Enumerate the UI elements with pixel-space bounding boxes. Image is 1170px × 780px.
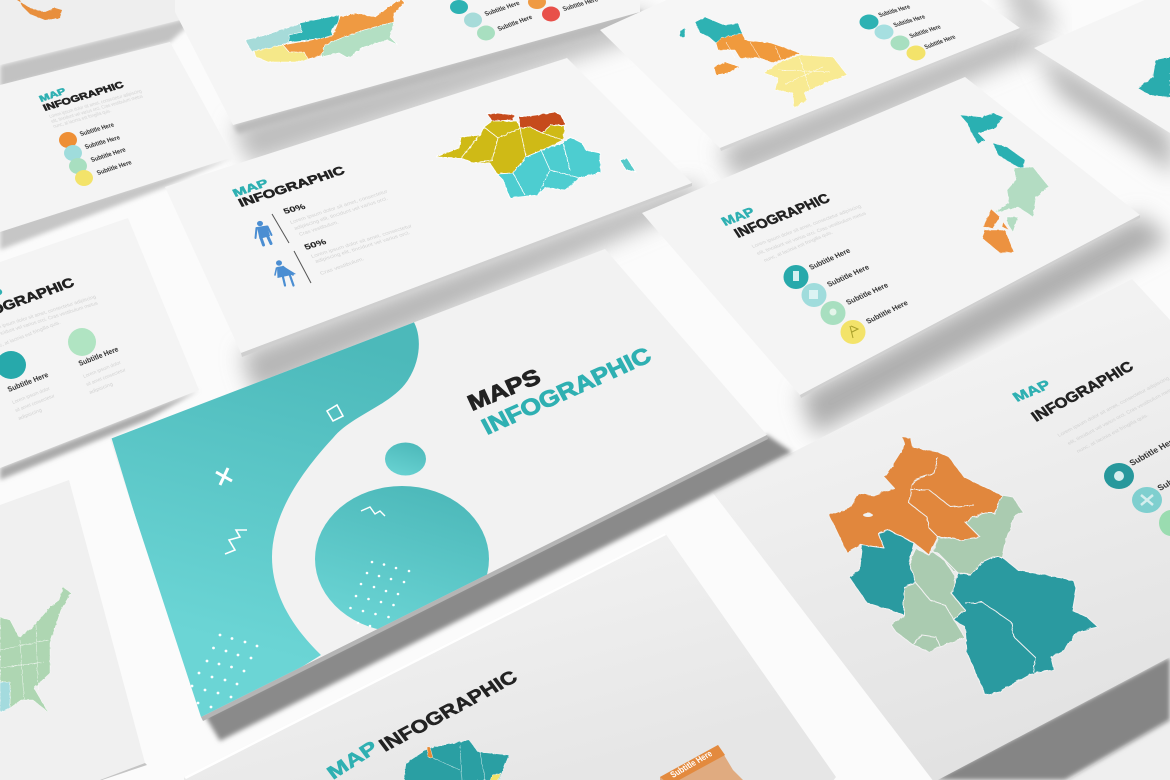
heading: map infographic [37,80,126,114]
icons and labels: UK slide [860,4,957,60]
icon: zigzag left [225,530,247,554]
stat: 50% female: Cras vestibulum. [319,256,365,277]
heading: map infographic: MAP [1009,377,1054,404]
text block: lorem: elit, tincidunt vel varius orci. Cras vestibulum metus [756,211,868,257]
text block: lorem: elit, tincidunt vel varius orci. Cras vestibulum metus [50,94,145,125]
text block: lorem [0,294,100,352]
labels: subtitles: sit amet consectetur [14,393,56,414]
labels: subtitles: adipiscing [88,381,114,396]
stat: 50% female: 50% [303,237,328,252]
panel: top-left slide with orange map [0,0,225,88]
stat: 50% female [294,223,414,283]
map: USA [245,0,405,62]
map: teal corner [1138,57,1170,97]
icons and labels: UK slide: Subtitle Here [877,4,912,19]
heading: map infographic: INFOGRAPHIC [236,163,347,210]
map: Japan [960,113,1049,253]
icon: green circle [68,328,96,356]
labels: subtitles [6,345,127,422]
icons and labels: four subtitles: Subtitle Here [825,263,871,289]
heading: map infographic [0,275,77,327]
labels: subtitles: Subtitle Here [6,370,50,394]
icons and labels: USA slide [450,0,600,40]
stat: 50% female: Lorem ipsum dolor sit amet, consectetur [310,223,414,260]
map: regions [829,437,1098,695]
panel: hero slide [100,249,792,741]
labels: subtitles: Lorem ipsum dolor [11,386,51,406]
text block: lorem: Lorem ipsum dolor sit amet, consectetur adipiscing [48,88,143,120]
icons and labels: USA slide: Subtitle Here [496,14,534,33]
panel: regions map slide [713,279,1170,780]
text block: lorem: elit, tincidunt vel varius orci. Cras vestibulum metus [1067,386,1170,447]
panel: bottom-right corner slide [1065,718,1170,780]
text block: lorem: Lorem ipsum dolor sit amet, consectetur adipiscing [751,204,863,250]
icons and labels: four subtitles: Subtitle Here [90,147,127,164]
shape: small circle [385,442,426,476]
icons and labels: four subtitles: Subtitle Here [84,134,122,151]
text block: lorem: nunc, at lacinia est fringilla quis. [1076,413,1150,455]
heading: map infographic: MAP [231,177,270,200]
icons and labels: UK slide: Subtitle Here [892,14,927,29]
map: orange [17,0,62,20]
stat: 50% male: adipiscing elit, tincidunt vel varius orci. [293,196,389,232]
icons and labels: UK slide: Subtitle Here [908,24,943,40]
map: UK [680,17,847,108]
heading: map infographic: INFOGRAPHIC [1028,358,1137,425]
icon: woman [275,260,296,286]
text block: lorem [1057,376,1170,455]
dots: lower left [191,634,258,708]
map: France [436,112,636,198]
title: maps infographic: INFOGRAPHIC [477,342,655,439]
panel: left slide with two icons [0,218,199,480]
icons and labels: UK slide: Subtitle Here [923,34,957,51]
icons and labels: four subtitles: Subtitle Here [79,122,116,138]
icons and labels: four subtitles [59,122,133,186]
icons and labels: four subtitles: Subtitle Here [96,159,133,177]
title: maps infographic: MAPS [464,364,544,416]
callout: subtitle card [660,745,745,780]
icon: diamond outline [327,405,343,421]
panel: top-right corner slide [1034,0,1170,175]
icon: zigzag circle [361,507,385,516]
stat: 50% female: adipiscing elit, tincidunt vel varius orci. [314,230,411,265]
panel: map infographic slide with four subtitles [0,42,233,250]
heading: map infographic: MAP [718,204,758,228]
text block: lorem: nunc, at lacinia est fringilla quis. [52,108,113,130]
labels: subtitles: sit amet consectetur [85,367,127,388]
text block: lorem [751,204,868,264]
heading: map infographic [323,667,522,780]
stat: 50% male: Lorem ipsum dolor sit amet, consectetur [289,189,389,226]
shape: teal wave [100,318,419,730]
heading: map infographic: INFOGRAPHIC [731,190,833,240]
shape: large circle [315,486,489,632]
stat: 50% male: Cras vestibulum. [298,220,340,238]
panel: Japan slide [642,77,1170,435]
dots: circle [349,561,410,627]
icons and labels: four subtitles: Subtitle Here [807,246,852,272]
heading: map infographic: MAP [37,86,67,104]
icon: cross [216,468,232,485]
heading: map infographic [231,163,347,210]
map: eastern USA [0,587,71,712]
labels: subtitles: Subtitle Here [77,345,120,368]
stat: 50% male [272,189,389,243]
panel: Africa slide [184,533,836,780]
heading: map infographic: INFOGRAPHIC [41,80,126,114]
stat: 50% male: 50% [282,202,307,216]
heading: map infographic: INFOGRAPHIC [375,667,522,756]
icons and labels: four subtitles: Subtitle Here [864,298,910,326]
panel: UK regions slide [600,0,1060,180]
text block: lorem: nunc, at lacinia est fringilla quis. [763,230,834,264]
text block: lorem: Lorem ipsum dolor sit amet, consectetur adipiscing [1057,376,1170,439]
panel: USA regions slide [175,0,660,165]
labels: subtitles: Lorem ipsum dolor [82,360,122,380]
icons and labels: four subtitles [784,246,910,344]
panel: bottom-left USA slide [0,480,147,780]
icons and labels: subtitles [1104,435,1170,536]
icons and labels: four subtitles: Subtitle Here [844,281,890,307]
callout: subtitle card: Subtitle Here [668,749,714,780]
panel: France slide [165,58,705,395]
icon: teal circle [0,351,26,379]
icon: man [256,221,272,245]
map: Africa [404,740,509,780]
labels: subtitles: adipiscing [17,407,43,422]
